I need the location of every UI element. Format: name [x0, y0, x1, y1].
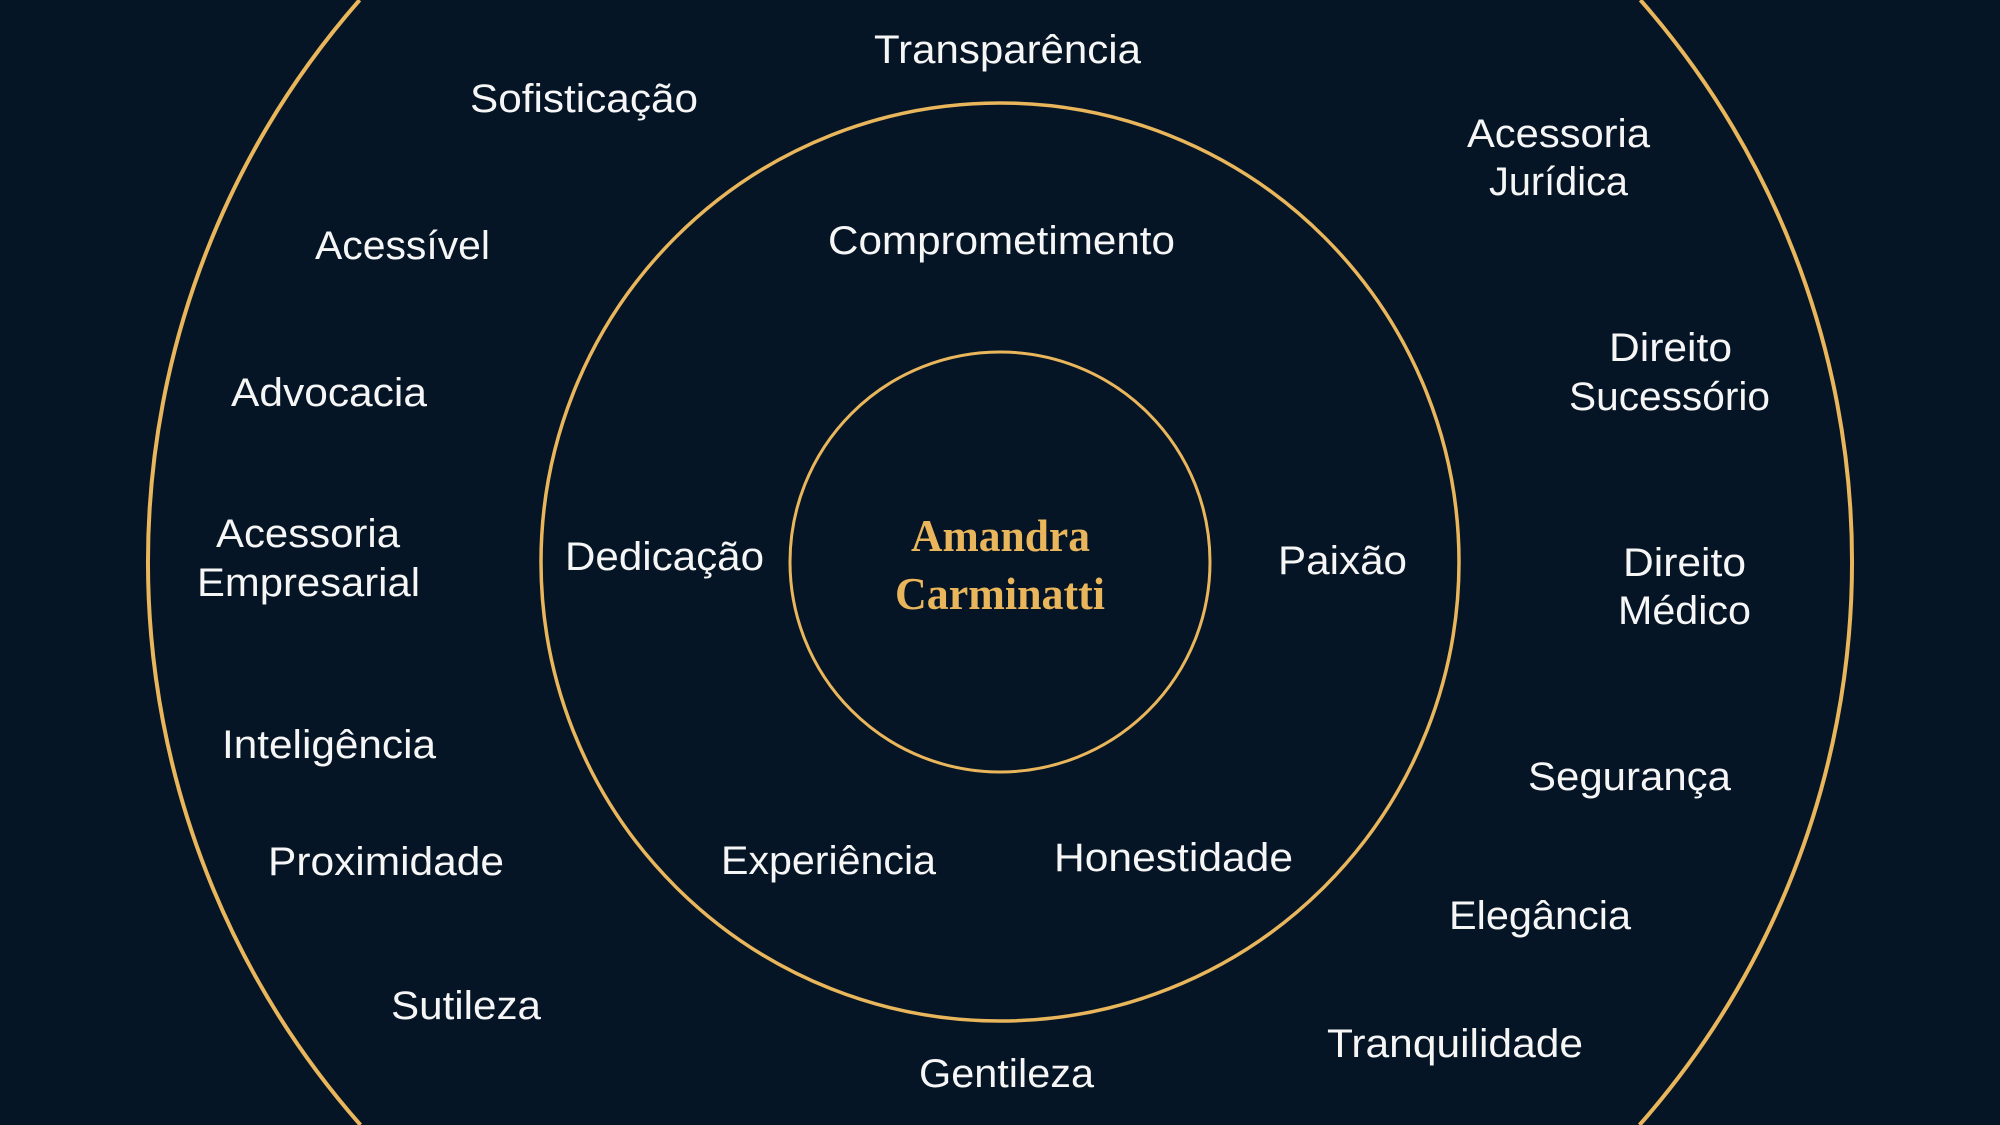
- label: Elegância: Elegância: [1449, 894, 1632, 938]
- label: Acessível: Acessível: [315, 224, 490, 268]
- label: Direito Sucessório: Sucessório: [1569, 375, 1770, 419]
- label: Direito Sucessório: [1569, 326, 1770, 419]
- inner ring: [790, 352, 1210, 772]
- label: Honestidade: Honestidade: [1054, 836, 1293, 880]
- center name: [895, 510, 1105, 619]
- label: Advocacia: Advocacia: [231, 371, 428, 415]
- label: Experiência: Experiência: [721, 839, 937, 883]
- label: Direito Médico: Direito: [1623, 541, 1746, 585]
- label: Sofisticação: Sofisticação: [470, 77, 698, 121]
- label: Direito Médico: Médico: [1618, 589, 1751, 633]
- label: Acessoria Empresarial: Acessoria: [216, 512, 401, 556]
- label: Transparência: Transparência: [874, 28, 1142, 72]
- label: Acessoria Jurídica: [1467, 112, 1651, 204]
- label: Comprometimento: Comprometimento: [828, 219, 1175, 263]
- outer ring values: [197, 28, 1770, 1096]
- label: Direito Sucessório: Direito: [1609, 326, 1732, 370]
- label: Acessoria Jurídica: Acessoria: [1467, 112, 1651, 156]
- label: Paixão: Paixão: [1278, 539, 1407, 583]
- label: Acessoria Jurídica: Jurídica: [1489, 160, 1629, 204]
- label: Sutileza: Sutileza: [391, 984, 542, 1028]
- label: Direito Médico: [1618, 541, 1751, 633]
- center name: Carminatti: [895, 568, 1105, 619]
- label: Segurança: Segurança: [1528, 755, 1732, 799]
- label: Proximidade: Proximidade: [268, 840, 504, 884]
- label: Inteligência: Inteligência: [222, 723, 437, 767]
- label: Dedicação: Dedicação: [565, 535, 764, 579]
- label: Gentileza: Gentileza: [919, 1052, 1095, 1096]
- middle ring: [541, 103, 1459, 1021]
- label: Tranquilidade: Tranquilidade: [1327, 1022, 1583, 1066]
- center name: Amandra: [911, 510, 1090, 561]
- label: Acessoria Empresarial: Empresarial: [197, 561, 420, 605]
- label: Acessoria Empresarial: [197, 512, 420, 605]
- middle ring values: [565, 219, 1407, 883]
